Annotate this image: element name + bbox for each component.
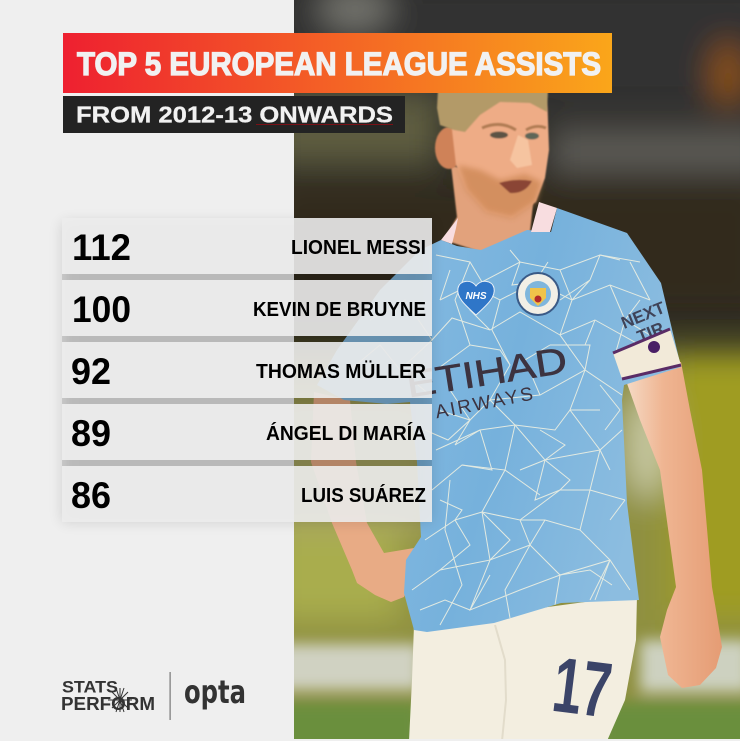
table shadow: [62, 222, 432, 522]
row 2: Kevin De Bruyne: KEVIN DE BRUYNE: [253, 299, 426, 321]
NHS heart badge: NHS: [465, 291, 487, 302]
Stats Perform and Opta logos: [61, 672, 246, 720]
row 4: Ángel Di María: [62, 404, 432, 460]
sponsor ETIHAD AIRWAYS: ETIHAD: [403, 340, 570, 405]
subtitle banner: [63, 96, 405, 133]
left background panel: [0, 0, 294, 741]
Stats Perform logo: STATS: [62, 678, 118, 696]
shorts: [409, 595, 637, 741]
Opta logo: opta: [184, 673, 246, 711]
sleeve sponsor second line: TIR: [634, 318, 667, 346]
row 1: Lionel Messi: [62, 218, 432, 274]
neck: [444, 165, 534, 252]
photo background: blurred stadium: [250, 0, 740, 741]
jersey: [317, 202, 681, 632]
collar: [441, 202, 557, 244]
Stats Perform logo: [61, 678, 155, 714]
row 5: Luis Suárez: LUIS SUÁREZ: [301, 484, 426, 507]
captain armband: [613, 329, 681, 379]
face: [437, 90, 549, 218]
title banner: [63, 33, 612, 93]
title banner: TOP 5 EUROPEAN LEAGUE ASSISTS: [77, 46, 601, 82]
row 2: Kevin De Bruyne: 100: [72, 289, 131, 330]
row 3: Thomas Müller: 92: [71, 351, 111, 392]
row 5: Luis Suárez: [62, 466, 432, 522]
NHS heart badge: [458, 281, 494, 315]
row 1: Lionel Messi: LIONEL MESSI: [291, 237, 426, 259]
row 5: Luis Suárez: 86: [71, 475, 111, 516]
photo: Kevin De Bruyne on pitch: [250, 0, 740, 741]
row 1: Lionel Messi: 112: [72, 227, 131, 268]
left arm and hand: [311, 398, 414, 602]
row shadow strips: [62, 274, 432, 466]
row 4: Ángel Di María: ÁNGEL DI MARÍA: [266, 422, 426, 445]
sponsor ETIHAD AIRWAYS: AIRWAYS: [434, 383, 538, 423]
subtitle banner: FROM 2012-13 ONWARDS: [76, 102, 393, 128]
table of top 5 assists: [62, 218, 432, 522]
row 3: Thomas Müller: THOMAS MÜLLER: [256, 360, 427, 383]
row 2: Kevin De Bruyne: [62, 280, 432, 336]
Stats Perform logo: PERFORM: [61, 694, 155, 714]
club crest: [517, 273, 559, 315]
right arm and hand: [624, 362, 722, 688]
sleeve sponsor: NEXT: [618, 298, 668, 333]
row 4: Ángel Di María: 89: [71, 413, 111, 454]
jersey crack pattern: [350, 250, 650, 625]
shirt number 17: 17: [548, 640, 616, 734]
ear: [434, 127, 457, 170]
row 3: Thomas Müller: [62, 342, 432, 398]
logo divider: [170, 672, 171, 720]
sponsor ETIHAD AIRWAYS: [408, 349, 566, 418]
